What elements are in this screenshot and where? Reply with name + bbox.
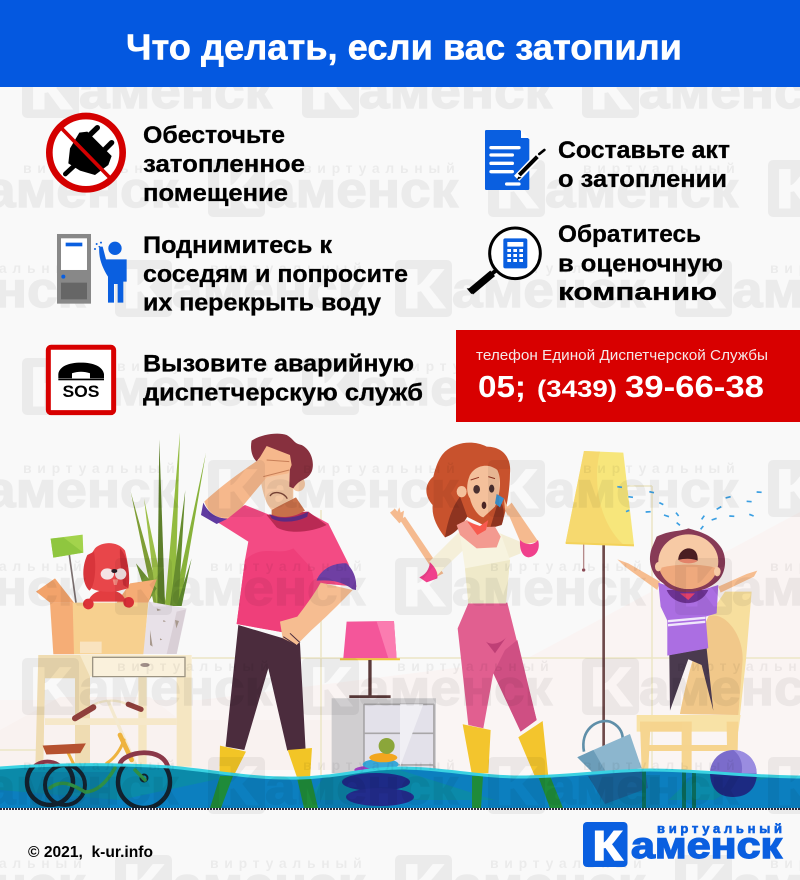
toy dog	[83, 543, 134, 609]
wall background	[0, 486, 800, 790]
watermark tiles: аменск	[359, 63, 553, 119]
submerged ball	[710, 772, 757, 797]
plant	[131, 433, 206, 606]
watermark tiles: виртуальный	[23, 757, 180, 773]
man	[201, 434, 357, 779]
text: их перекрыть воду	[143, 290, 382, 316]
text: Обесточьте	[143, 122, 285, 149]
watermark tiles: виртуальный	[303, 160, 460, 176]
watermark tiles: аменск	[545, 162, 739, 218]
dresser	[332, 698, 436, 773]
water	[0, 766, 800, 808]
floor line	[0, 808, 800, 810]
green tag on stick	[51, 535, 83, 603]
text: Обратитесь	[558, 221, 701, 248]
cardboard box	[36, 578, 157, 654]
watermark tiles: виртуальный	[397, 658, 554, 674]
watermark tiles: аменск	[265, 462, 459, 518]
text: помещение	[143, 180, 288, 207]
watermark tiles: аменск	[452, 262, 646, 318]
chair	[637, 592, 752, 770]
purple sleeves	[317, 563, 356, 590]
watermark tiles: аменск	[545, 462, 739, 518]
title: Что делать, если вас затопили	[126, 26, 682, 68]
icon: magnifier with calculator	[467, 228, 540, 294]
open mouth	[678, 548, 698, 561]
watermark tiles: виртуальный	[490, 260, 647, 276]
raised arm	[204, 446, 292, 519]
watermark tiles: виртуальный	[117, 61, 274, 77]
face	[658, 534, 718, 589]
phone number: 39-66-38	[625, 369, 764, 404]
watermark tiles: виртуальный	[583, 460, 740, 476]
phone number: (3439)	[537, 376, 617, 403]
text: Поднимитесь к	[143, 232, 333, 259]
phone number: 05;	[478, 369, 526, 404]
side table	[35, 655, 192, 767]
step: go to neighbours	[57, 232, 408, 316]
watermark tiles: виртуальный	[397, 61, 554, 77]
text: о затоплении	[558, 166, 727, 193]
text	[143, 350, 423, 406]
face	[467, 466, 500, 517]
watermark tiles: аменск	[172, 560, 366, 616]
watermark tiles: аменск	[79, 360, 273, 416]
plant, box, dog and side table	[34, 433, 436, 779]
watermark tiles: виртуальный	[583, 757, 740, 773]
watermark tiles: аменск	[172, 262, 366, 318]
watermark tiles: виртуальный	[23, 460, 180, 476]
watermark tiles: виртуальный	[210, 260, 367, 276]
submerged chair legs	[642, 770, 696, 808]
table lamp	[340, 621, 400, 698]
icon: crossed-out plug	[49, 116, 123, 189]
blouse	[459, 530, 510, 603]
shopping bag	[577, 721, 642, 773]
illustration: flooded room	[0, 433, 800, 809]
tears	[617, 487, 762, 529]
legs	[669, 648, 713, 711]
phone	[495, 494, 504, 507]
submerged bag	[588, 770, 648, 804]
shirt	[658, 583, 718, 656]
text: в оценочную	[558, 250, 723, 278]
logo: К	[592, 822, 623, 869]
text	[143, 122, 305, 207]
watermark tiles: виртуальный	[210, 855, 367, 871]
ball	[710, 750, 757, 797]
watermark tiles: виртуальный	[117, 658, 274, 674]
arms	[617, 559, 660, 590]
crying girl	[617, 487, 762, 711]
water surface	[0, 765, 800, 778]
phone caption: телефон Единой Диспетчерской Службы	[476, 347, 768, 364]
submerged bicycle	[24, 766, 172, 808]
hand on hip	[280, 583, 353, 645]
face	[258, 453, 293, 510]
hair	[251, 434, 313, 488]
right arm	[507, 503, 538, 545]
floor lamp	[566, 451, 634, 747]
icon: document and pen	[485, 130, 544, 190]
copyright: © 2021, k-ur.info	[28, 844, 153, 861]
bicycle	[34, 701, 168, 768]
yellow boots	[219, 746, 312, 779]
logo	[583, 821, 783, 869]
boots	[463, 721, 548, 777]
scarf	[457, 520, 501, 548]
text	[558, 137, 730, 193]
header band	[0, 0, 800, 87]
stacking toy	[354, 738, 399, 774]
text	[558, 221, 723, 306]
text	[143, 232, 408, 316]
watermark tiles: виртуальный	[490, 558, 647, 574]
woman, floor lamp, bag, chair and child	[390, 443, 762, 797]
phone number	[478, 369, 764, 404]
watermark tiles: аменск	[359, 660, 553, 716]
watermark tiles: виртуальный	[397, 358, 554, 374]
icon: SOS telephone	[48, 347, 114, 413]
watermark tiles: аменск	[452, 560, 646, 616]
step: call emergency service	[48, 347, 423, 413]
step: de-energize	[49, 116, 305, 207]
ear	[292, 477, 305, 491]
shirt	[217, 505, 357, 633]
icon: person at door	[57, 234, 127, 304]
watermark tiles: виртуальный	[210, 558, 367, 574]
watermark tiles: виртуальный	[583, 160, 740, 176]
watermark tiles: виртуальный	[303, 460, 460, 476]
step: draw up report	[485, 130, 730, 193]
left arm	[400, 517, 443, 578]
hair	[650, 528, 725, 592]
watermark tiles: аменск	[79, 660, 273, 716]
text: соседям и попросите	[143, 261, 408, 288]
watermark tiles: виртуальный	[490, 855, 647, 871]
neck	[272, 497, 305, 517]
watermark tiles: аменск	[545, 759, 739, 815]
trousers	[226, 625, 306, 751]
watermark tiles: аменск	[79, 63, 273, 119]
text: диспетчерскую служб	[143, 380, 423, 406]
watermark tiles: виртуальный	[117, 358, 274, 374]
logo: виртуальный	[657, 821, 782, 836]
watermark tiles: виртуальный	[303, 757, 460, 773]
step: contact appraisal company	[467, 221, 723, 306]
phone panel	[456, 330, 800, 422]
hand at phone	[504, 498, 512, 517]
SOS label: SOS	[62, 383, 100, 401]
trousers	[458, 603, 537, 732]
woman	[390, 443, 548, 777]
logo: аменск	[631, 825, 783, 866]
watermark tiles: аменск	[359, 360, 553, 416]
watermark tiles: виртуальный	[23, 160, 180, 176]
submerged boots	[210, 776, 563, 808]
text: затопленное	[143, 151, 305, 178]
watermark tiles: аменск	[265, 759, 459, 815]
submerged toy	[342, 773, 414, 806]
watermark tiles: аменск	[265, 162, 459, 218]
pot	[143, 602, 187, 654]
text: Составьте акт	[558, 137, 730, 164]
text: Вызовите аварийную	[143, 350, 414, 378]
back hair	[426, 443, 510, 537]
text: компанию	[558, 279, 717, 306]
